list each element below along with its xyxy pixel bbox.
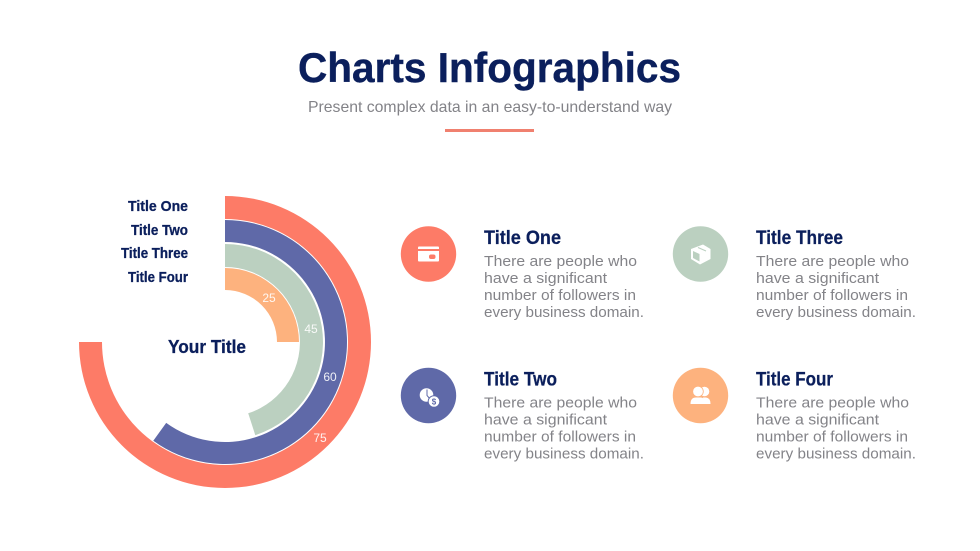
item: Title Two: There are people who xyxy=(484,394,637,412)
subtitle: Present complex data in an easy-to-understand way xyxy=(308,99,672,116)
item: Title Four: have a significant xyxy=(756,412,880,428)
title: Charts Infographics xyxy=(298,44,681,91)
item: Title One: have a significant xyxy=(484,270,608,287)
value: 25: 25 xyxy=(262,291,276,305)
icon: clock and coin xyxy=(401,368,456,423)
ring: Title One 75 xyxy=(79,196,371,488)
radial bar chart xyxy=(79,196,371,488)
icon: box xyxy=(673,226,728,282)
label: Title Two: Title Two xyxy=(131,222,188,239)
ring: Title Three 45 xyxy=(225,244,323,435)
item: Title Three: There are people who xyxy=(756,253,909,270)
item: Title Two: number of followers in xyxy=(484,428,636,446)
ring: Title Two 60 xyxy=(153,220,347,464)
item: Title One: every business domain. xyxy=(484,304,644,321)
label: Title Four: Title Four xyxy=(128,269,188,286)
title underline xyxy=(445,129,534,132)
item: Title Two xyxy=(484,370,644,462)
item: Title One: There are people who xyxy=(484,253,637,270)
value: 75: 75 xyxy=(313,431,327,445)
chart legend labels xyxy=(121,198,188,286)
item: Title Three xyxy=(756,228,916,321)
chart centre title: Your Title xyxy=(168,337,246,357)
item: Title Four xyxy=(756,370,916,462)
item: Title Two: Title Two xyxy=(484,370,557,390)
item: Title One: Title One xyxy=(484,228,561,249)
ring: Title Four 25 xyxy=(225,268,299,342)
label: Title Three: Title Three xyxy=(121,245,188,262)
item: Title Four: There are people who xyxy=(756,394,909,412)
icon: credit card xyxy=(401,226,456,282)
item: Title Three: every business domain. xyxy=(756,304,916,321)
value: 45: 45 xyxy=(304,322,318,336)
item: Title Two: every business domain. xyxy=(484,446,644,462)
item: Title Three: have a significant xyxy=(756,270,880,287)
item: Title Four: Title Four xyxy=(756,370,834,390)
value: 60: 60 xyxy=(323,370,337,384)
item: Title One: number of followers in xyxy=(484,287,636,304)
item: Title Three: number of followers in xyxy=(756,287,908,304)
icon: users xyxy=(673,368,728,423)
item: Title Four: every business domain. xyxy=(756,446,916,462)
icon: clock and coin: $ xyxy=(432,398,437,406)
label: Title One: Title One xyxy=(128,198,188,215)
item: Title Four: number of followers in xyxy=(756,428,908,446)
item: Title Two: have a significant xyxy=(484,412,608,428)
item: Title Three: Title Three xyxy=(756,228,843,249)
item: Title One xyxy=(484,228,644,321)
